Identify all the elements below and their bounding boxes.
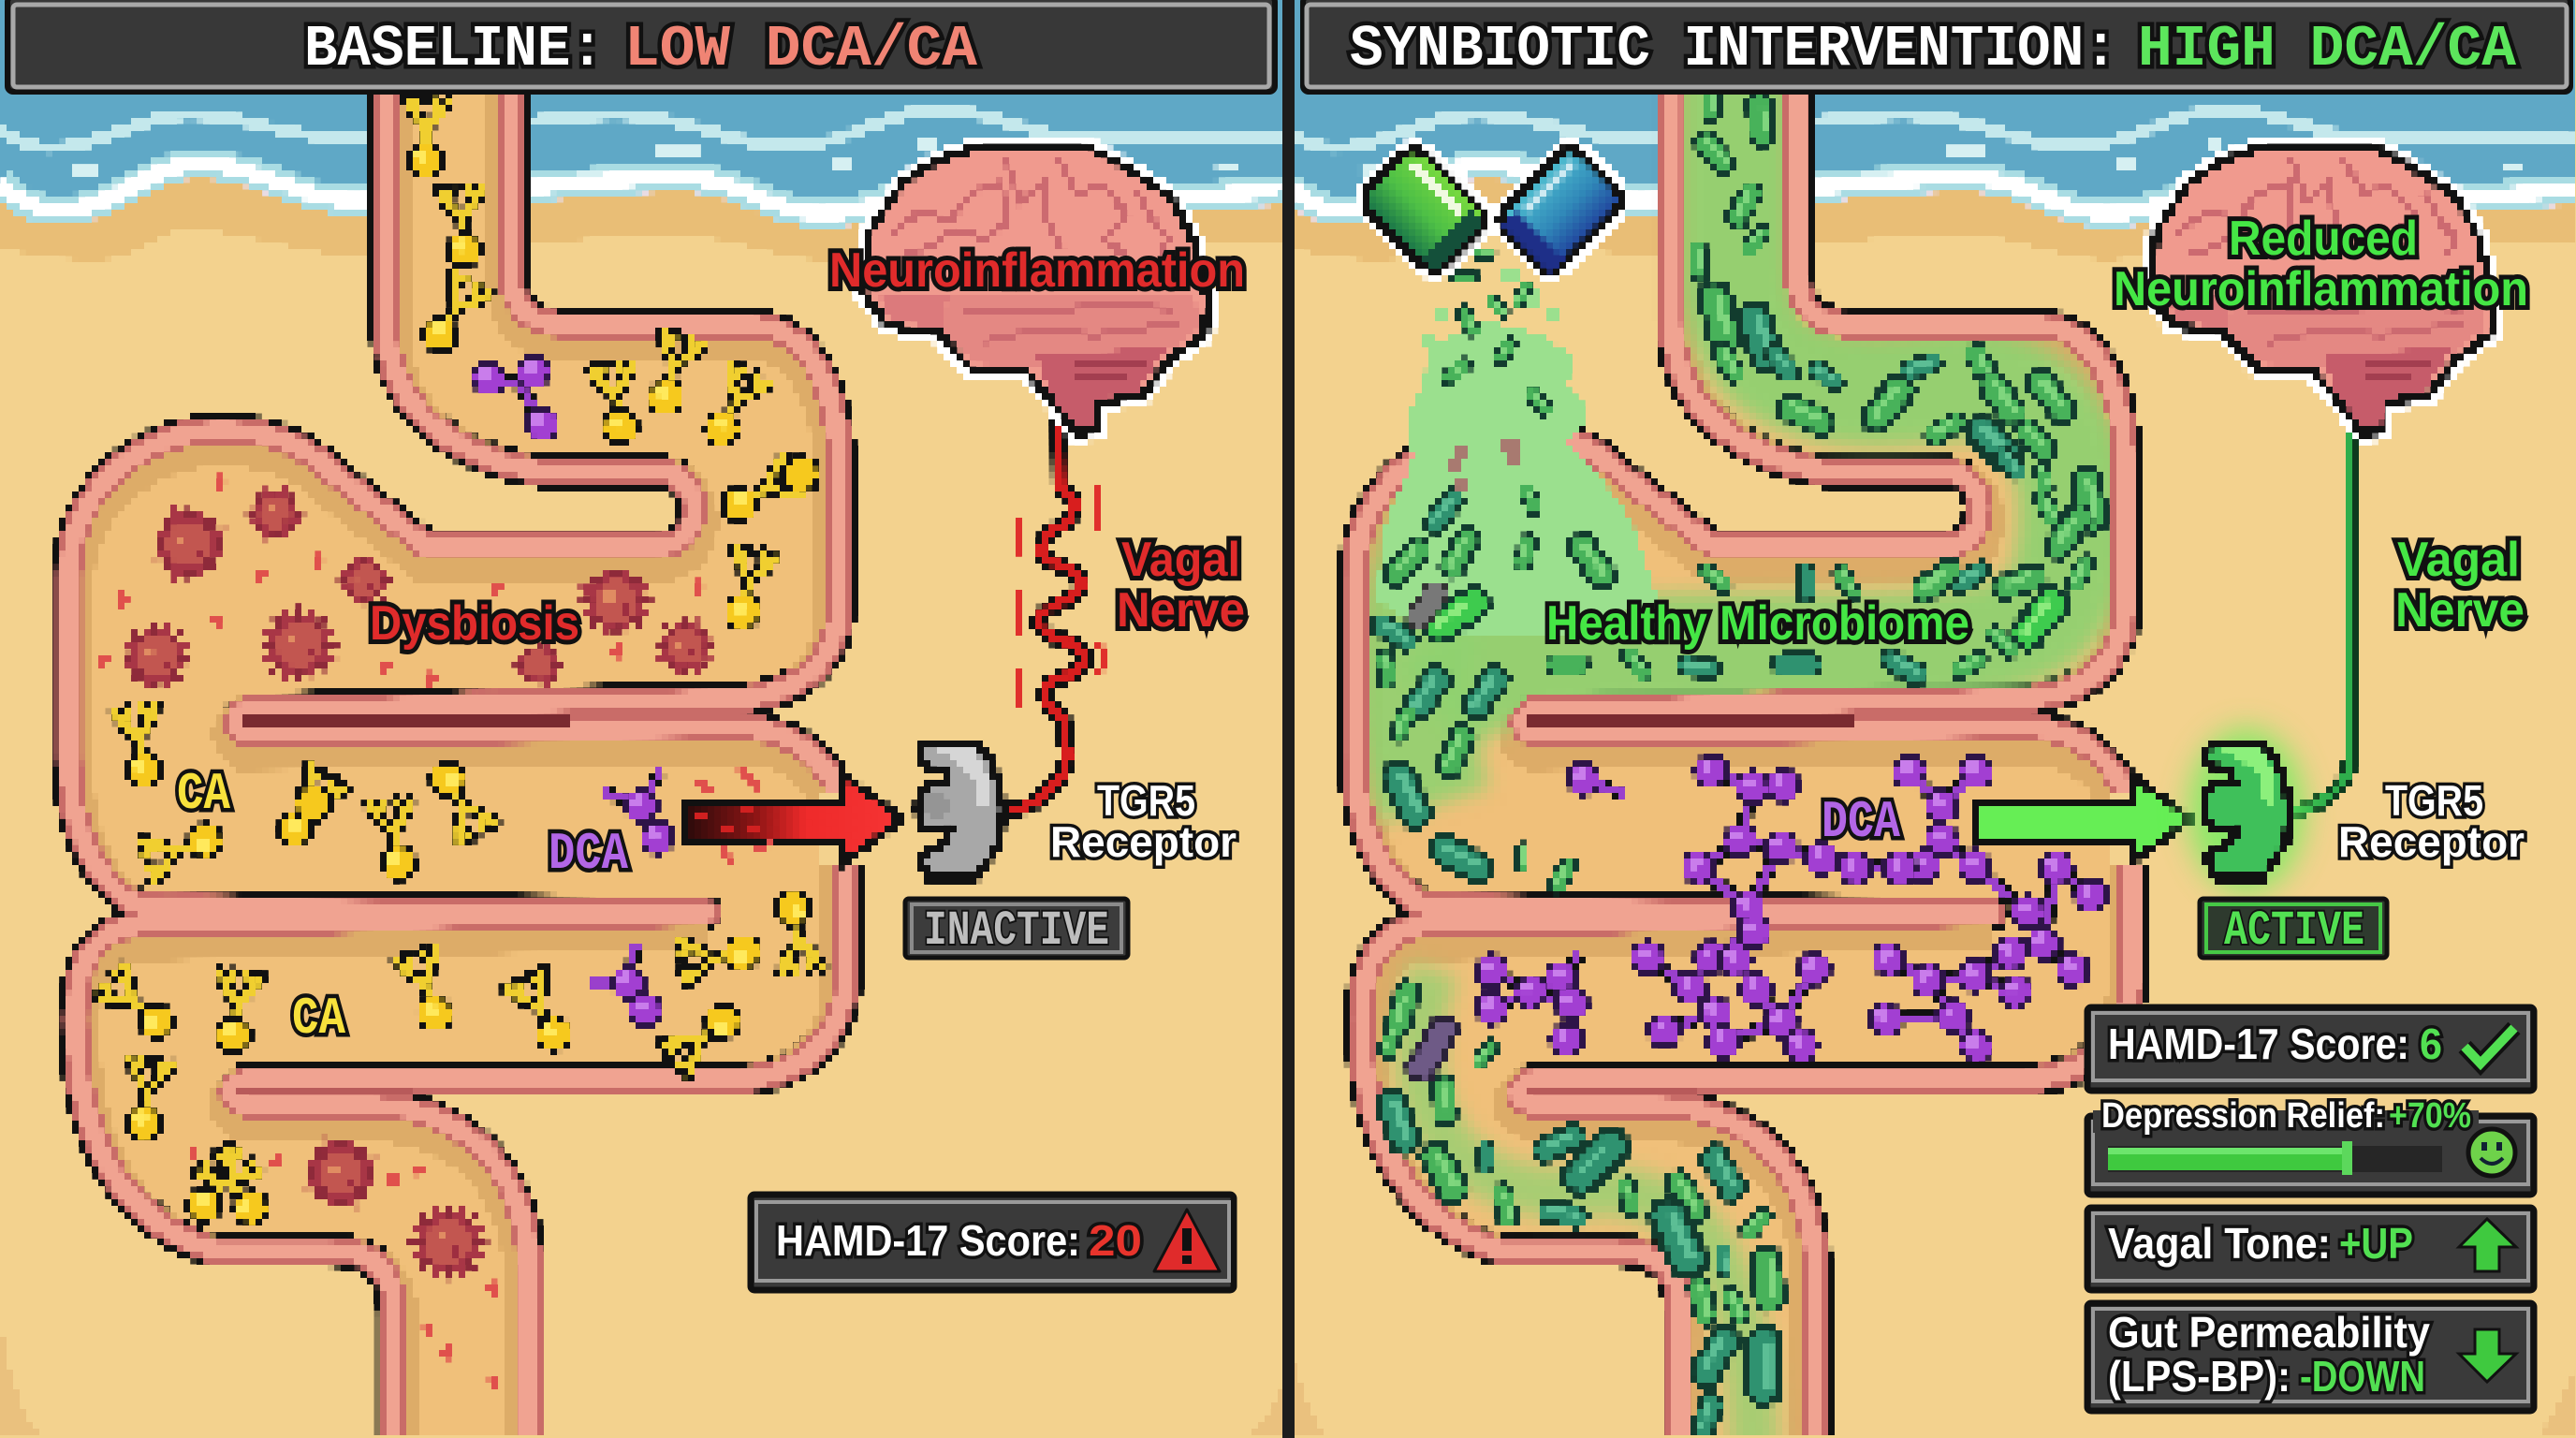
- HAMD-17 score box: [751, 1195, 1234, 1290]
- panel: baseline: [0, 0, 1297, 1438]
- stat: gut permeability: Gut Permeability: [2108, 1308, 2430, 1357]
- label: DCA: DCA: [549, 824, 628, 884]
- label: Vagal Nerve: [1117, 533, 1245, 638]
- label: Dysbiosis: Dysbiosis: [370, 596, 579, 651]
- badge: ACTIVE: ACTIVE: [2224, 903, 2364, 959]
- stat: depression relief: Depression Relief:: [2101, 1096, 2385, 1136]
- stat: gut permeability: -DOWN: [2300, 1352, 2425, 1401]
- green probiotic cloud: [1376, 271, 1657, 637]
- badge: INACTIVE: INACTIVE: [924, 903, 1109, 959]
- header: baseline: BASELINE:: [304, 16, 604, 82]
- TGR5 receptor active: [2188, 728, 2305, 893]
- beach background right: [1286, 0, 2576, 1438]
- label: Neuroinflammation: Neuroinflammation: [829, 243, 1245, 298]
- vagal nerve red wavy: [1003, 412, 1103, 813]
- bad bacteria: dysbiosis: [97, 475, 726, 1390]
- vagal nerve green: [2291, 412, 2351, 813]
- label: Vagal Nerve: [2395, 533, 2525, 638]
- red arrow: [686, 768, 903, 866]
- stat: HAMD-17 score: 6: [2420, 1020, 2442, 1068]
- HAMD-17 score box: 20: [1089, 1216, 1142, 1265]
- label: Vagal Nerve: Nerve: [1117, 583, 1245, 638]
- green arrow: [1974, 774, 2191, 863]
- label: Reduced Neuroinflammation: Reduced: [2229, 212, 2418, 266]
- panel: synbiotic intervention: [1286, 0, 2576, 1438]
- icon: up arrow: [2459, 1219, 2516, 1271]
- label: Vagal Nerve: Vagal: [1121, 533, 1240, 587]
- brain right: [2150, 145, 2494, 433]
- icon: check mark: [2465, 1028, 2514, 1064]
- label: TGR5 Receptor: TGR5: [2385, 776, 2483, 825]
- label: Reduced Neuroinflammation: [2114, 212, 2528, 316]
- header: baseline: LOW DCA/CA: [624, 16, 978, 82]
- stat: HAMD-17 score: [2087, 1007, 2534, 1091]
- label: Reduced Neuroinflammation: Neuroinflammation: [2114, 262, 2528, 316]
- header: synbiotic: SYNBIOTIC INTERVENTION:: [1350, 16, 2117, 82]
- header: synbiotic: HIGH DCA/CA: [2138, 16, 2517, 82]
- label: Vagal Nerve: Nerve: [2395, 583, 2525, 638]
- label: TGR5 Receptor: TGR5: [1097, 776, 1195, 825]
- stat: vagal tone: [2087, 1208, 2534, 1290]
- icon: blue capsule: [1494, 143, 1627, 276]
- label: TGR5 Receptor: [1050, 776, 1237, 866]
- stat: vagal tone: Vagal Tone:: [2108, 1219, 2331, 1268]
- DCA molecules (purple): [471, 354, 675, 1028]
- label: CA: CA: [177, 764, 230, 824]
- label: TGR5 Receptor: [2338, 776, 2525, 866]
- panel divider: [1282, 0, 1295, 1438]
- DCA network (purple): [1474, 754, 2109, 1064]
- label: TGR5 Receptor: Receptor: [1050, 817, 1237, 866]
- icon: down arrow: [2459, 1329, 2516, 1382]
- stat: gut permeability: (LPS-BP):: [2108, 1352, 2291, 1401]
- stat: HAMD-17 score: HAMD-17 Score:: [2108, 1020, 2409, 1068]
- header: synbiotic: [1303, 0, 2570, 92]
- brain left: [864, 145, 1208, 433]
- stat: vagal tone: +UP: [2339, 1219, 2413, 1268]
- progress bar: [2108, 1141, 2442, 1175]
- label: TGR5 Receptor: Receptor: [2338, 817, 2525, 866]
- beach background left: [0, 0, 1297, 1438]
- gut tube right: [1355, 50, 2155, 1438]
- TGR5 receptor inactive: [917, 742, 1003, 878]
- icon: smiley: [2468, 1129, 2515, 1176]
- label: CA second: CA: [292, 989, 345, 1049]
- stat: gut permeability: [2087, 1303, 2534, 1411]
- stat: depression relief: [2087, 1096, 2534, 1195]
- icon: green capsule: [1358, 143, 1491, 276]
- icon: capsules: [1358, 143, 1627, 276]
- icon: warning triangle: [1154, 1210, 1220, 1271]
- label: Healthy Microbiome: Healthy Microbiome: [1546, 596, 1969, 651]
- gut tube left: [69, 50, 869, 1438]
- header: baseline: [7, 0, 1275, 92]
- label: DCA: DCA: [1822, 792, 1900, 852]
- stat: depression relief: +70%: [2389, 1096, 2471, 1136]
- label: Vagal Nerve: Vagal: [2397, 533, 2520, 587]
- CA molecules (yellow): [97, 98, 822, 1234]
- HAMD-17 score box: HAMD-17 Score:: [776, 1216, 1080, 1265]
- healthy bacteria rods: [1366, 82, 2112, 1438]
